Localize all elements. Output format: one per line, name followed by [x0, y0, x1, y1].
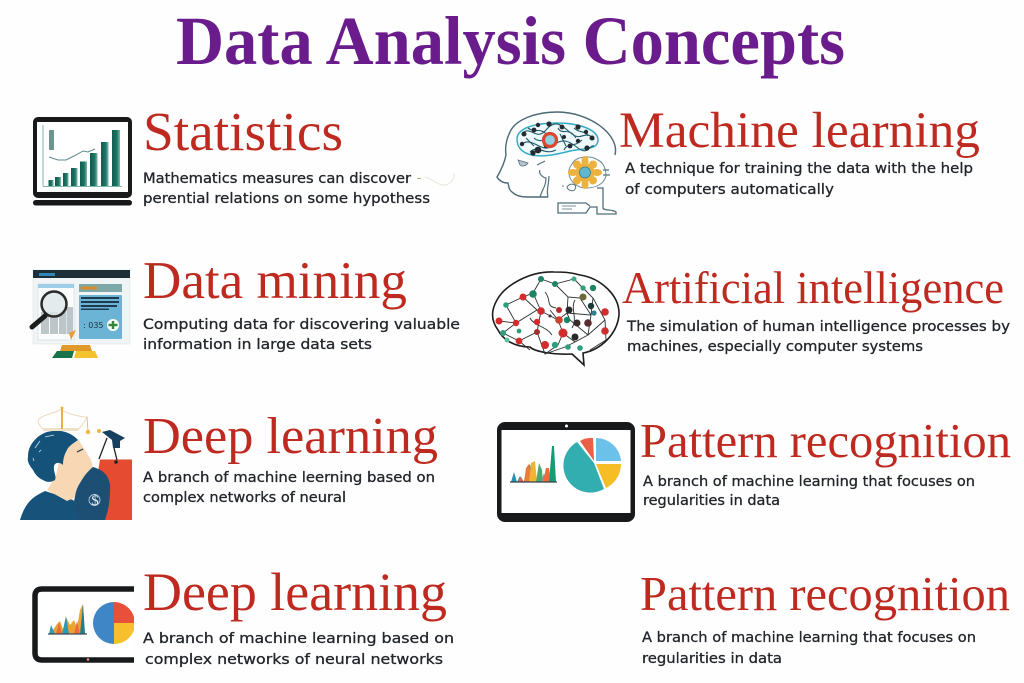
description: Mathematics measures can discover	[143, 171, 411, 187]
description	[143, 171, 430, 207]
icon: student with graduation cap: $	[91, 493, 99, 509]
heading: Data mining	[143, 252, 407, 310]
description	[143, 470, 435, 506]
icon: laptop with bar chart	[33, 117, 132, 206]
description: The simulation of human intelligence processes by	[626, 319, 1010, 335]
icon: dashboard with magnifier	[32, 270, 130, 358]
description	[143, 317, 460, 353]
panel: pattern recognition	[497, 413, 1011, 522]
icon: tablet with pie chart	[497, 422, 635, 522]
heading: Pattern recognition	[640, 413, 1011, 468]
description: A technique for training the data with the help	[625, 161, 973, 177]
icon: dashboard with magnifier: : 035	[83, 321, 104, 330]
panel: pattern recognition second	[640, 566, 1010, 667]
description	[643, 474, 975, 509]
heading: Pattern recognition	[640, 566, 1010, 621]
panel: artificial intelligence	[493, 262, 1010, 365]
heading: Artificial intelligence	[622, 262, 1004, 313]
title: Data Analysis Concepts	[176, 3, 845, 79]
heading: Statistics	[143, 101, 343, 162]
description	[625, 161, 973, 198]
description: A branch of machine learning based on	[143, 631, 454, 647]
description	[143, 631, 454, 668]
description: of computers automatically	[625, 182, 834, 198]
heading: Machine learning	[619, 103, 980, 159]
icon: student with graduation cap	[20, 406, 132, 520]
description: information in large data sets	[143, 337, 372, 353]
heading: Deep learning	[143, 562, 447, 622]
panel: machine learning	[497, 103, 980, 214]
description: regularities in data	[642, 651, 782, 667]
description: A branch of machine learning that focuses on	[642, 630, 976, 646]
panel: deep learning	[20, 406, 438, 520]
description: machines, especially computer systems	[627, 339, 923, 355]
description	[626, 319, 1010, 355]
description: A branch of machine learning that focuses on	[643, 474, 975, 490]
icon: tablet with charts	[35, 589, 134, 661]
description: A branch of machine leerning based on	[143, 470, 435, 486]
panel: statistics	[33, 101, 454, 207]
description: regularities in data	[643, 493, 780, 509]
description	[642, 630, 976, 667]
icon: neural network brain	[493, 272, 619, 365]
description: complex networks of neural	[143, 490, 346, 506]
panel: data mining	[32, 252, 460, 358]
description: perential relations on some hypothess	[143, 191, 430, 207]
heading: Deep learning	[143, 408, 438, 465]
panel: deep learning second	[35, 562, 454, 668]
description: complex networks of neural networks	[145, 652, 443, 668]
description: Computing data for discovering valuable	[143, 317, 460, 333]
icon: head with brain and gear	[497, 112, 616, 214]
